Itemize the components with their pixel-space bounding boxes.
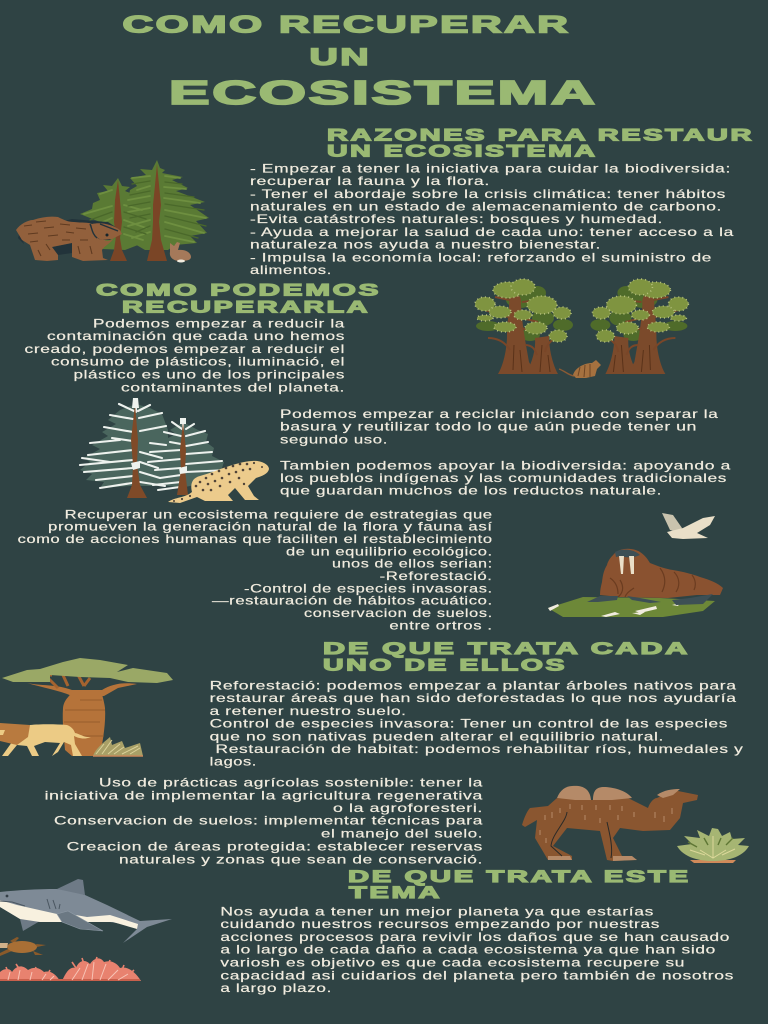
illustration: left sequoia [475,279,573,374]
text block: razones: recuperar la fauna y la flora. [250,174,490,188]
text block: como podemos recuperarla: creado, podemos empezar a reducir el [24,342,345,356]
text block: reforestación, especies, hábitat: restaurar áreas que han sido deforestadas lo que nos ayudaría [210,691,737,705]
text block: reforestación, especies, hábitat: Restauración de habitat: podemos rehabilitar ríos, humedales y [216,742,744,756]
text block: reciclar y biodiversidad [280,407,731,498]
illustration: baobab, lion and grass [0,658,173,756]
text block: recuperar un ecosistema: como de acciones humanas que faciliten el restablecimiento [18,532,493,546]
text block: como podemos recuperarla: plástico es uno de los principales [74,368,345,382]
title [122,12,598,112]
heading: como podemos recuperarla [96,281,381,317]
illustration: redwoods, bear and rabbit [16,160,209,262]
heading: razones para restaur un ecosistema [327,126,754,161]
text block: razones: - Impulsa la economía local: reforzando el suministro de [250,250,712,264]
text block: de que trata este tema [220,904,734,995]
text block: prácticas agrícolas y conservación: el manejo del suelo. [321,827,483,841]
illustration: shark [0,879,172,943]
text block: prácticas agrícolas y conservación: Uso de prácticas agrícolas sostenible: tener la [99,775,483,789]
heading: de que trata este tema [348,867,691,902]
illustration: camel [522,786,698,861]
text block: de que trata este tema: capacidad asi cuidarios del planeta pero también de nosotros [220,968,734,982]
text block: razones: naturaleza nos ayuda a nuestro bienestar. [250,238,601,252]
illustration: coral [0,957,141,981]
text block: prácticas agrícolas y conservación: Creacion de áreas protegida: establecer reservas [67,840,483,854]
text block: razones: - Tener el abordaje sobre la crisis climática: tener hábitos [250,187,726,201]
text block: como podemos recuperarla: contaminantes del planeta. [121,380,345,394]
illustration: sea turtle [0,937,46,956]
text block: recuperar un ecosistema: entre ortros . [389,618,493,632]
text block: reciclar y biodiversidad: Tambien podemos apoyar la biodiversida: apoyando a [280,458,731,472]
text block: reciclar y biodiversidad: segundo uso. [280,433,388,447]
text block: recuperar un ecosistema: promueven la generación natural de la flora y fauna así [48,520,493,534]
text block: reforestación, especies, hábitat: lagos. [210,755,257,769]
text block: de que trata este tema: cuidando nuestros recursos empezando por nuestras [220,917,660,931]
text block: recuperar un ecosistema: -Control de especies invasoras. [244,581,493,595]
text block: como podemos recuperarla: Podemos empezar a reducir la [93,316,345,330]
text block: de que trata este tema: variosh es objetivo es que cada ecosistema recupere su [220,956,685,970]
title: ECOSISTEMA [169,75,598,112]
text block: recuperar un ecosistema: -Reforestació. [380,569,493,583]
text block: reforestación, especies, hábitat: Control de especies invasora: Tener un control de las especies [210,717,728,731]
text block: prácticas agrícolas y conservación [45,775,483,866]
text block: razones [250,162,734,277]
heading: de que trata este tema: TEMA [349,883,442,902]
text block: reciclar y biodiversidad: basura y reutilizar todo lo que aún puede tener un [280,420,697,434]
text block: recuperar un ecosistema: conservacion de suelos. [304,606,493,620]
text block: razones: - Ayuda a mejorar la salud de cada uno: tener acceso a la [250,225,734,239]
heading: de que trata cada uno de ellos [323,639,690,675]
heading: de que trata cada uno de ellos: DE QUE TRATA CADA [323,639,690,658]
text block: como podemos recuperarla: consumo de plásticos, iluminació, el [51,355,345,369]
text block: razones: -Evita catástrofes naturales: bosques y humedad. [250,212,663,226]
text block: como podemos recuperarla: contaminación que cada uno hemos [47,329,345,343]
title: UN [310,44,371,71]
text block: reforestación, especies, hábitat: que no son nativas pueden alterar el equilibrio natural. [210,729,664,743]
text block: reforestación, especies, hábitat: Reforestació: podemos empezar a plantar árboles nativos para [210,678,737,692]
text block: reciclar y biodiversidad: Podemos empezar a reciclar iniciando con separar la [280,407,718,421]
text block: de que trata este tema: a lo largo de cada daño a cada ecosistema ya que han sido [220,943,716,957]
text block: razones: - Empezar a tener la iniciativa para cuidar la biodiversida: [250,162,731,176]
text block: como podemos recuperarla [24,316,345,394]
heading: como podemos recuperarla: COMO PODEMOS [96,281,381,300]
heading: de que trata este tema: DE QUE TRATA ESTE [348,867,691,886]
title: COMO RECUPERAR [122,12,570,38]
text block: recuperar un ecosistema [18,507,493,632]
illustration: right sequoia [590,279,688,374]
illustration: owl [662,513,715,539]
text block: recuperar un ecosistema: de un equilibrio ecológico. [286,544,493,558]
text block: razones: alimentos. [250,263,332,277]
text block: prácticas agrícolas y conservación: Conservacion de suelos: implementar técnicas para [54,814,483,828]
text block: reciclar y biodiversidad: los pueblos indígenas y las comunidades tradicionales [280,471,727,485]
illustration: armadillo [559,360,601,378]
text block: recuperar un ecosistema: Recuperar un ecosistema requiere de estrategias que [65,507,493,521]
text block: reforestación, especies, hábitat: a retener nuestro suelo. [210,704,407,718]
text block: prácticas agrícolas y conservación: o la agroforesteri. [333,801,483,815]
text block: prácticas agrícolas y conservación: naturales y zonas que sean de conservació. [119,852,483,866]
text block: recuperar un ecosistema: —restauración de hábitos acuático. [212,594,493,608]
text block: de que trata este tema: acciones procesos para revivir los daños que se han causado [220,930,730,944]
illustration: walrus on grass [548,549,723,617]
heading: como podemos recuperarla: RECUPERARLA [122,298,370,317]
illustration: snowy pines and jaguar [80,398,269,503]
text block: prácticas agrícolas y conservación: iniciativa de implementar la agricultura regenerativa [45,788,483,802]
illustration: agave plant [677,828,749,863]
heading: de que trata cada uno de ellos: UNO DE ELLOS [323,656,567,675]
text block: de que trata este tema: a largo plazo. [220,981,332,995]
text block: recuperar un ecosistema: unos de ellos serian: [332,557,493,571]
text block: razones: naturales en un estado de alemacenamiento de carbono. [250,200,722,214]
heading: razones para restaur un ecosistema: RAZONES PARA RESTAUR [327,126,754,145]
heading: razones para restaur un ecosistema: UN ECOSISTEMA [327,142,598,161]
text block: reciclar y biodiversidad: que guardan muchos de los reductos naturale. [280,484,662,498]
text block: reforestación, especies, hábitat [210,678,744,769]
text block: de que trata este tema: Nos ayuda a tener un mejor planeta ya que estarías [220,904,654,918]
